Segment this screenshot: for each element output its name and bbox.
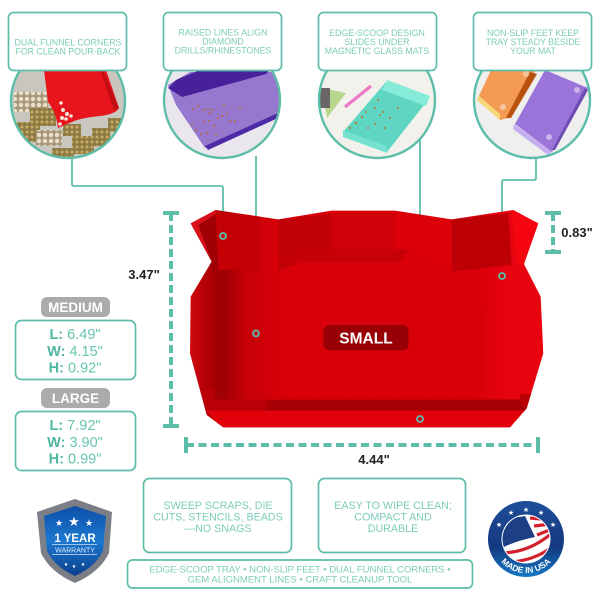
badge: 1 year warranty shield: ★ bbox=[81, 562, 86, 568]
feature list box: EDGE-SCOOP TRAY • NON-SLIP FEET • DUAL FUNNEL CORNERS • bbox=[149, 564, 451, 576]
benefit box: sweep scraps bbox=[144, 478, 292, 552]
callout: non-slip feet: NON-SLIP FEET KEEP bbox=[487, 28, 579, 38]
benefit box: sweep scraps: CUTS, STENCILS, BEADS bbox=[153, 512, 283, 524]
benefit box: easy to wipe clean bbox=[318, 478, 466, 552]
badge: made in USA: ★ bbox=[508, 509, 514, 517]
badge: 1 year warranty shield: ★ bbox=[85, 518, 93, 528]
feature list box bbox=[128, 560, 472, 588]
badge: made in USA: ★ bbox=[523, 506, 529, 514]
badge: 1 year warranty shield: 1 YEAR bbox=[54, 533, 96, 545]
badge: 1 year warranty shield: ★ bbox=[68, 514, 80, 529]
badge: made in USA: ★ bbox=[496, 521, 502, 529]
benefit box: easy to wipe clean: COMPACT AND bbox=[354, 512, 432, 524]
specs: medium: W: 4.15" bbox=[47, 344, 103, 360]
photo circle: red tray funnel corner with rhinestones bbox=[12, 71, 124, 157]
specs: medium: L: 6.49" bbox=[49, 327, 101, 343]
size pill: large bbox=[41, 388, 110, 408]
badge: 1 year warranty shield: WARRANTY bbox=[55, 548, 95, 554]
callout: dual funnel corners bbox=[8, 12, 126, 70]
callout: non-slip feet: YOUR MAT bbox=[510, 46, 557, 56]
specs: large: H: 0.99" bbox=[49, 452, 101, 468]
ring: circle 3 outline bbox=[319, 42, 435, 158]
benefit box: easy to wipe clean: DURABLE bbox=[368, 523, 418, 535]
callout: non-slip feet bbox=[474, 12, 592, 70]
specs: large: L: 7.92" bbox=[49, 418, 101, 434]
badge: 1 year warranty shield bbox=[37, 499, 112, 583]
dimension: lip height 0.83: 0.83" bbox=[561, 225, 593, 240]
callout: dual funnel corners: DUAL FUNNEL CORNERS bbox=[15, 38, 122, 48]
photo circle: purple tray with drills bbox=[165, 71, 279, 157]
anchor dot: edge scoop bbox=[417, 416, 423, 422]
anchor dot: funnel corners bbox=[220, 233, 226, 239]
callout: dual funnel corners: FOR CLEAN POUR-BACK bbox=[15, 46, 121, 56]
dimension: height 3.47 bbox=[128, 213, 179, 426]
size pill: medium: MEDIUM bbox=[48, 300, 103, 315]
anchor dot: raised lines bbox=[253, 330, 259, 336]
size label: small: SMALL bbox=[339, 330, 393, 348]
specs: medium: H: 0.92" bbox=[49, 360, 101, 376]
callout: non-slip feet: TRAY STEADY BESIDE bbox=[486, 37, 581, 47]
badge: made in USA bbox=[488, 501, 564, 577]
specs: medium bbox=[16, 320, 136, 380]
dimension: width 4.44 bbox=[186, 437, 538, 467]
photo circle: mint tray under glass mat bbox=[320, 72, 434, 157]
callout: edge scoop design: SLIDES UNDER bbox=[344, 37, 410, 47]
red tray bbox=[190, 210, 544, 428]
benefit box: easy to wipe clean: EASY TO WIPE CLEAN; bbox=[334, 500, 452, 512]
benefit box: sweep scraps: —NO SNAGS bbox=[184, 523, 252, 535]
connector: non-slip feet to tray bbox=[502, 156, 536, 273]
callout: raised lines bbox=[164, 12, 282, 70]
callout: edge scoop design: EDGE-SCOOP DESIGN bbox=[329, 28, 425, 38]
badge: 1 year warranty shield: ★ bbox=[64, 562, 69, 568]
specs: large: W: 3.90" bbox=[47, 435, 103, 451]
dimension: height 3.47: 3.47" bbox=[128, 267, 160, 282]
ring: circle 1 outline bbox=[11, 44, 125, 158]
badge: made in USA: ★ bbox=[550, 521, 556, 529]
connector: raised lines to tray bbox=[255, 156, 257, 331]
ring: circle 4 outline bbox=[474, 42, 590, 158]
dimension: lip height 0.83 bbox=[545, 213, 593, 252]
callout: raised lines: DRILLS/RHINESTONES bbox=[175, 46, 271, 56]
connector: funnel corners to tray bbox=[72, 156, 223, 233]
ring: circle 2 outline bbox=[164, 42, 280, 158]
callout: raised lines: RAISED LINES ALIGN bbox=[179, 28, 267, 38]
feature list box: GEM ALIGNMENT LINES • CRAFT CLEANUP TOOL bbox=[188, 574, 412, 586]
badge: 1 year warranty shield: ★ bbox=[55, 518, 63, 528]
badge: made in USA: ★ bbox=[538, 509, 544, 517]
photo circle: orange and purple trays with non-slip feet bbox=[475, 71, 589, 157]
size pill: large: LARGE bbox=[52, 391, 99, 406]
benefit box: sweep scraps: SWEEP SCRAPS, DIE bbox=[163, 500, 273, 512]
size pill: medium bbox=[41, 297, 110, 317]
badge: made in USA: MADE IN USA bbox=[501, 558, 551, 573]
specs: large bbox=[16, 412, 136, 470]
badge: 1 year warranty shield: ★ bbox=[72, 564, 77, 570]
anchor dot: non-slip feet bbox=[499, 273, 505, 279]
callout: edge scoop design: MAGNETIC GLASS MATS bbox=[325, 46, 429, 56]
size label: small bbox=[324, 325, 408, 350]
connector: edge scoop to tray bbox=[419, 140, 421, 416]
callout: edge scoop design bbox=[318, 12, 436, 70]
dimension: width 4.44: 4.44" bbox=[358, 452, 390, 467]
callout: raised lines: DIAMOND bbox=[202, 36, 244, 46]
